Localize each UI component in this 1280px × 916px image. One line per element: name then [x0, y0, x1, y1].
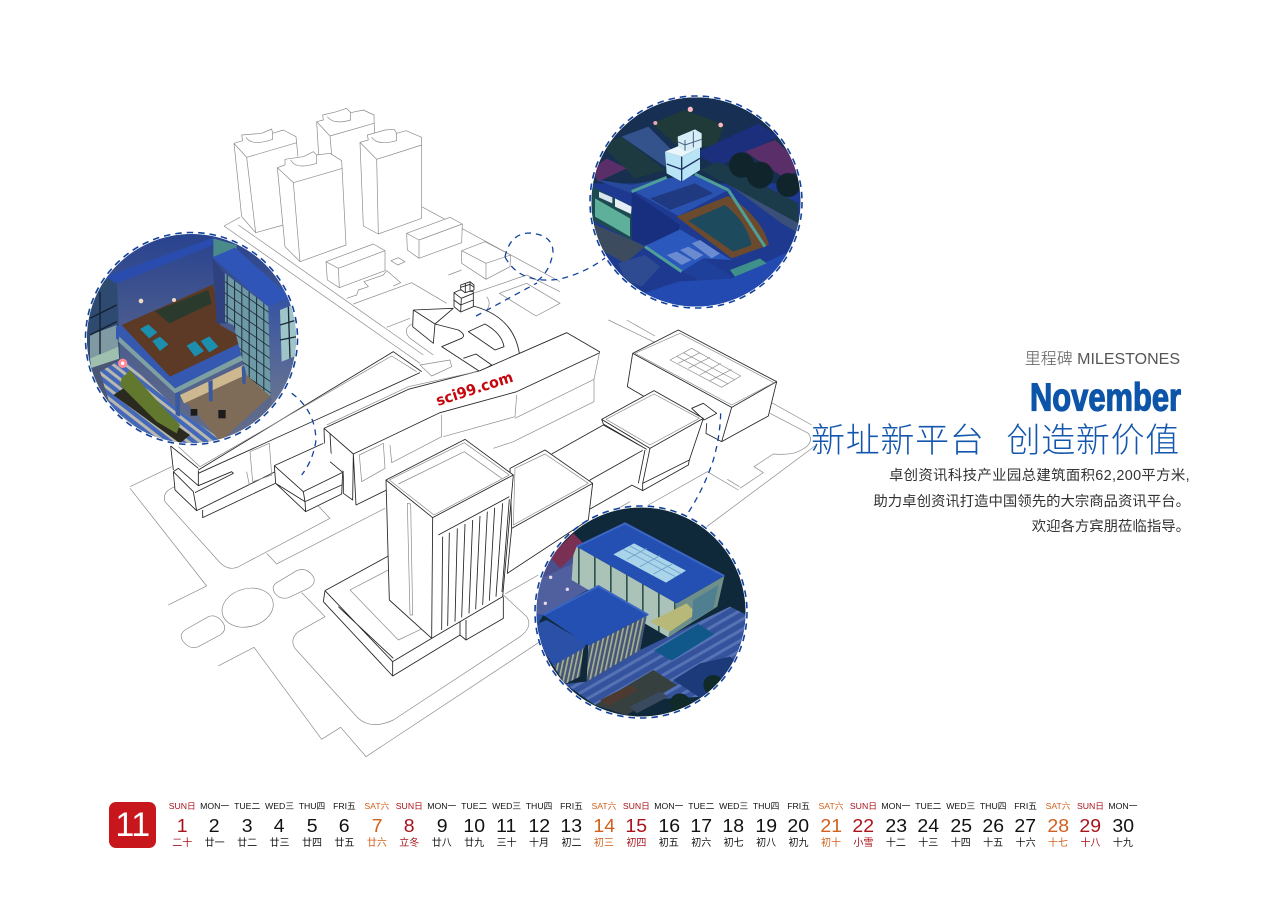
calendar strip: 初七	[724, 838, 744, 849]
calendar strip: SUN日	[396, 801, 423, 811]
calendar strip: 26	[982, 816, 1004, 836]
calendar strip: 初六	[691, 838, 711, 849]
calendar strip: WED三	[265, 801, 294, 811]
calendar strip: TUE二	[234, 801, 260, 811]
small entrance block	[274, 442, 343, 512]
calendar strip: 初九	[789, 838, 809, 849]
calendar strip: 初十	[821, 838, 841, 849]
calendar strip: 廿三	[270, 838, 290, 849]
calendar strip: 初八	[756, 838, 776, 849]
calendar strip: THU四	[299, 801, 325, 811]
calendar strip: 廿九	[464, 838, 484, 849]
photo circle: terrace at night	[84, 232, 298, 446]
photo circle: east wing with pool	[534, 505, 748, 719]
description text	[873, 468, 1190, 535]
calendar strip: 2	[209, 816, 220, 836]
calendar strip: 十月	[529, 838, 549, 849]
calendar strip: 廿五	[334, 838, 354, 849]
calendar strip: TUE二	[915, 801, 941, 811]
calendar strip: WED三	[719, 801, 748, 811]
calendar strip: THU四	[753, 801, 779, 811]
calendar strip: 17	[690, 816, 712, 836]
calendar strip: 13	[561, 816, 582, 836]
calendar strip: 6	[339, 816, 350, 836]
site plan: east ground outlines	[608, 320, 815, 527]
calendar strip: 16	[658, 816, 680, 836]
description text: 助力卓创资讯打造中国领先的大宗商品资讯平台。	[873, 494, 1190, 510]
calendar strip: 十七	[1048, 838, 1068, 849]
calendar strip: SAT六	[364, 801, 389, 811]
calendar strip: 十六	[1016, 838, 1036, 849]
calendar strip: THU四	[980, 801, 1006, 811]
calendar strip: 22	[853, 816, 874, 836]
tall tower with podium	[323, 439, 513, 676]
calendar strip: 初五	[659, 838, 679, 849]
calendar strip: 10	[463, 816, 485, 836]
calendar strip: 14	[593, 816, 615, 836]
calendar strip: MON一	[200, 801, 229, 811]
calendar strip: 7	[371, 816, 382, 836]
calendar strip: 29	[1080, 816, 1101, 836]
description text: 卓创资讯科技产业园总建筑面积62,200平方米,	[889, 468, 1190, 484]
calendar strip: 1	[177, 816, 188, 836]
calendar strip: SAT六	[1046, 801, 1070, 811]
calendar strip: 廿二	[237, 838, 257, 849]
calendar strip: 30	[1112, 816, 1134, 836]
calendar strip: MON一	[881, 801, 910, 811]
calendar strip: 初三	[594, 838, 614, 849]
section label: 里程碑 MILESTONES	[1025, 351, 1180, 368]
description text: 欢迎各方宾朋莅临指导。	[1032, 519, 1190, 535]
calendar strip: MON一	[654, 801, 683, 811]
calendar strip: 11	[497, 816, 517, 836]
calendar strip: WED三	[946, 801, 975, 811]
calendar strip: 十三	[918, 838, 938, 849]
calendar strip: 18	[723, 816, 744, 836]
calendar strip: 5	[307, 816, 317, 836]
calendar strip: 初二	[561, 838, 581, 849]
calendar strip: 23	[885, 816, 907, 836]
calendar strip: 20	[788, 816, 809, 836]
calendar strip: 廿四	[302, 838, 322, 849]
calendar strip: 廿六	[367, 838, 387, 849]
brand wordmark on roof: sci99.com	[434, 368, 515, 410]
calendar strip: 4	[274, 816, 285, 836]
calendar strip: 27	[1015, 816, 1036, 836]
main headline: 新址新平台 创造新价值	[811, 422, 1180, 460]
calendar strip: FRI五	[560, 801, 583, 811]
calendar strip: 24	[917, 816, 939, 836]
calendar strip: 廿一	[205, 838, 225, 849]
calendar strip: 十八	[1080, 838, 1100, 849]
calendar strip: 十九	[1113, 838, 1133, 849]
calendar strip: 小雪	[853, 838, 873, 849]
dashed connector: to terrace photo	[292, 393, 316, 475]
calendar strip: 廿八	[432, 838, 452, 849]
calendar strip: 十二	[886, 838, 906, 849]
photo circle: plaza with glass cube	[589, 95, 803, 309]
calendar strip: SUN日	[850, 801, 877, 811]
calendar strip: SUN日	[623, 801, 650, 811]
month badge	[109, 802, 156, 848]
building illustration	[84, 95, 815, 757]
calendar strip: MON一	[1108, 801, 1137, 811]
main building with curved roof	[324, 333, 600, 505]
calendar strip: FRI五	[333, 801, 356, 811]
calendar strip: 25	[950, 816, 972, 836]
dashed connector: to east wing photo	[687, 413, 721, 515]
east wing: skylight block and connected halls	[507, 330, 777, 573]
calendar strip: THU四	[526, 801, 552, 811]
calendar strip: 9	[436, 816, 447, 836]
calendar strip: FRI五	[787, 801, 810, 811]
calendar strip: 十五	[983, 838, 1003, 849]
central plaza and glass cube outline	[413, 282, 519, 372]
calendar strip: SUN日	[169, 801, 196, 811]
calendar strip: TUE二	[461, 801, 487, 811]
dashed connector: to plaza cube photo	[476, 233, 605, 316]
month badge: 11	[115, 806, 150, 844]
calendar strip: 28	[1047, 816, 1069, 836]
west wing: long office building	[171, 352, 422, 518]
calendar strip	[169, 801, 1138, 849]
calendar strip: SAT六	[591, 801, 616, 811]
site plan: road and ground outlines	[130, 467, 540, 757]
calendar strip: FRI五	[1014, 801, 1037, 811]
calendar strip: 8	[404, 816, 415, 836]
background towers and low blocks	[224, 108, 560, 376]
calendar strip: 3	[242, 816, 252, 836]
calendar strip: TUE二	[688, 801, 714, 811]
calendar strip: 初四	[626, 838, 646, 849]
calendar strip: 12	[528, 816, 550, 836]
calendar strip: 21	[820, 816, 842, 836]
calendar strip: 15	[626, 816, 647, 836]
calendar strip: SAT六	[818, 801, 843, 811]
calendar strip: WED三	[492, 801, 521, 811]
calendar strip: SUN日	[1077, 801, 1104, 811]
calendar strip: 立冬	[399, 838, 419, 849]
calendar strip: 二十	[172, 838, 192, 849]
calendar strip: 19	[755, 816, 777, 836]
calendar strip: 三十	[497, 838, 517, 849]
calendar strip: 十四	[951, 838, 971, 849]
calendar strip: MON一	[427, 801, 456, 811]
